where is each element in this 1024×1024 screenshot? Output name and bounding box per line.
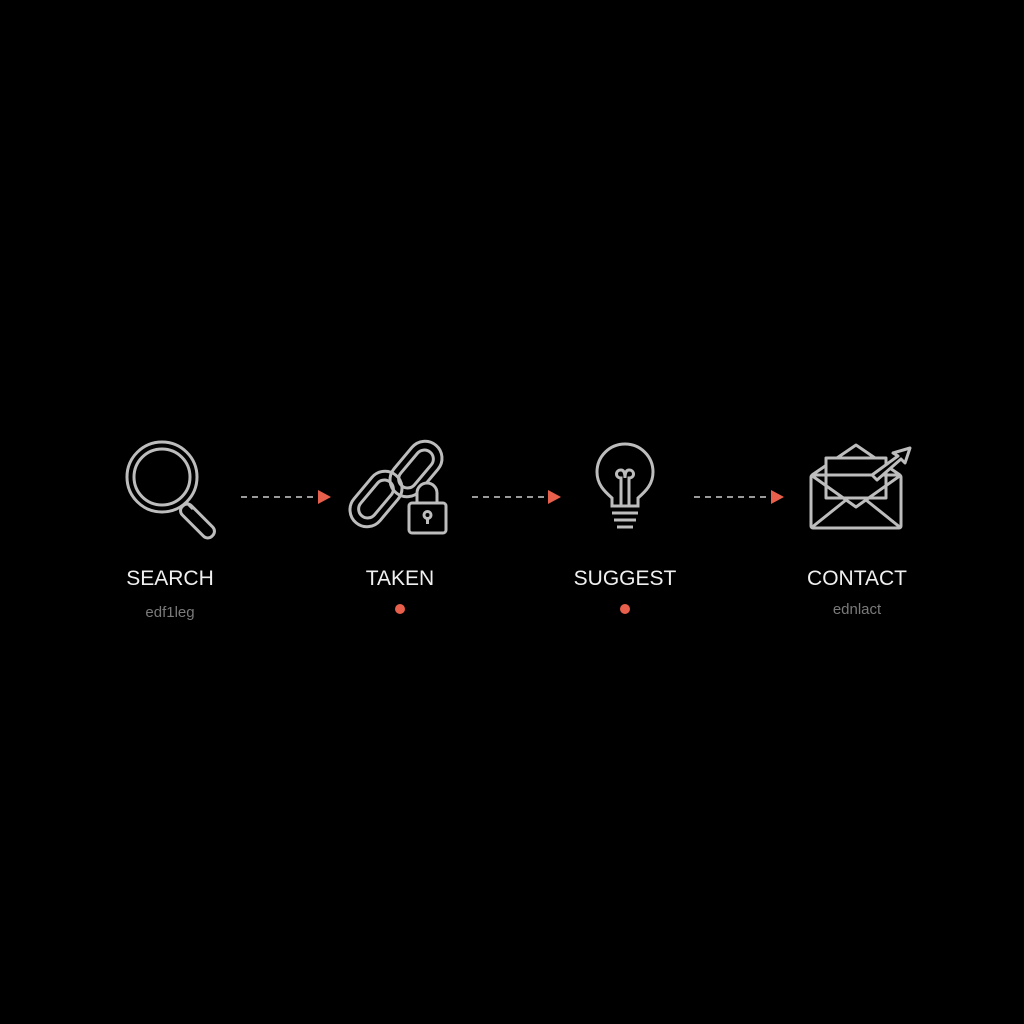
subtext: ednlact <box>833 601 882 618</box>
arrow 1 <box>241 490 331 504</box>
label: SEARCH: SEARCH <box>126 567 214 590</box>
arrow 2 <box>472 490 561 504</box>
subtext: edf1leg <box>145 604 195 621</box>
icon: envelope with arrow <box>811 445 910 528</box>
label: SUGGEST: SUGGEST <box>574 567 677 590</box>
status dot <box>620 604 630 614</box>
status dot <box>395 604 405 614</box>
step: suggest <box>574 444 677 614</box>
step: taken <box>343 434 449 614</box>
icon: magnifying glass <box>127 442 217 540</box>
label: CONTACT: CONTACT <box>807 567 907 590</box>
icon: chain with lock <box>343 434 449 534</box>
step: contact <box>807 445 910 618</box>
arrow 3 <box>694 490 784 504</box>
step: search <box>126 442 217 621</box>
label: TAKEN: TAKEN <box>366 567 434 590</box>
icon: light bulb <box>597 444 653 527</box>
